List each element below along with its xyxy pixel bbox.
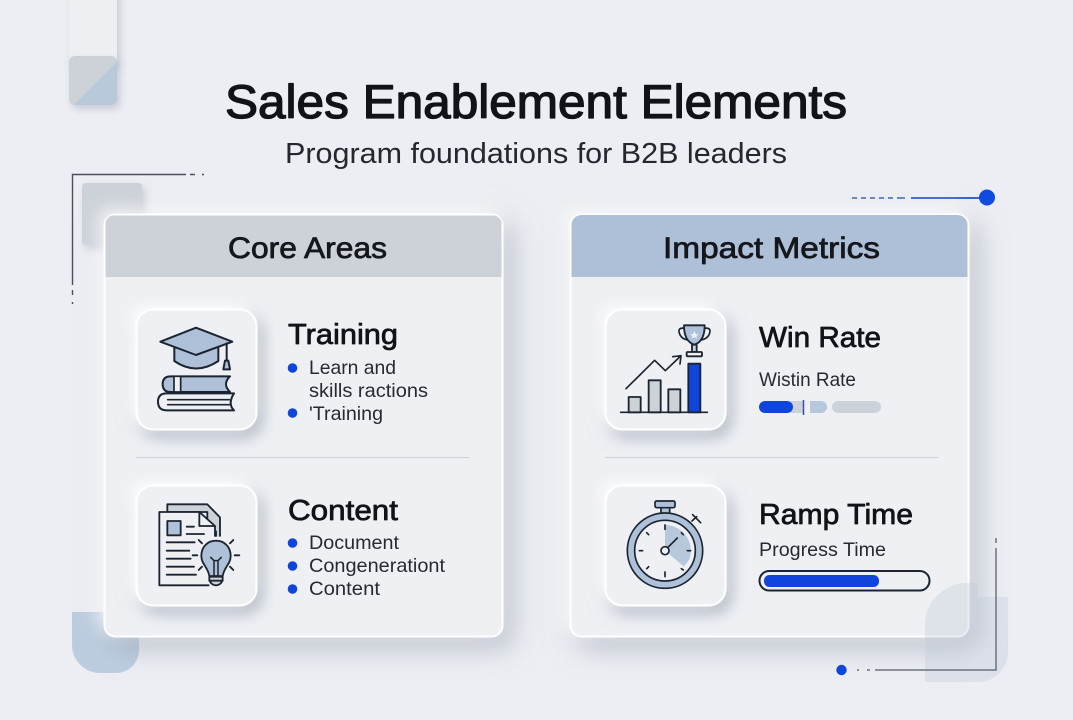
bullet list: training: 'Training — [309, 403, 383, 425]
bullet list: training: Learn and — [309, 357, 396, 379]
sublabel: progress time: Progress Time — [759, 539, 886, 561]
subtitle: Program foundations for B2B leaders — [285, 138, 787, 170]
icon: document and light bulb — [136, 486, 256, 606]
segmented progress bar — [759, 400, 881, 415]
icon: stopwatch — [606, 486, 726, 606]
row: win rate — [606, 310, 881, 430]
row: training — [136, 310, 428, 430]
sublabel: wistin rate: Wistin Rate — [759, 369, 856, 391]
bullet list: content: Congenerationt — [309, 555, 446, 577]
bullet list: training — [288, 357, 428, 425]
panel header — [572, 215, 968, 277]
decoration: bottom-right translucent shape — [925, 583, 1008, 682]
panel: impact metrics — [570, 214, 968, 636]
label: win rate: Win Rate — [759, 322, 881, 354]
label: ramp time: Ramp Time — [759, 499, 913, 531]
bullet list: content — [288, 532, 446, 600]
bullet list: training: skills ractions — [309, 380, 428, 402]
title: Sales Enablement Elements — [225, 75, 847, 128]
label: content: Content — [288, 495, 398, 527]
panel card — [570, 214, 968, 636]
bullet list: content: Content — [309, 578, 381, 600]
decoration: bottom-left shape — [72, 612, 139, 673]
progress bar — [760, 571, 930, 590]
decoration: top-right connector — [852, 190, 995, 206]
heading: impact metrics: Impact Metrics — [663, 232, 880, 265]
row: content — [136, 486, 446, 606]
decoration: top-left folded tab — [69, 0, 117, 105]
label: training: Training — [288, 319, 398, 351]
icon: bar chart with trophy — [606, 310, 726, 430]
panel card — [104, 214, 502, 636]
icon: graduation cap and books — [136, 310, 256, 430]
panel: core areas — [104, 214, 502, 636]
panel header — [106, 216, 502, 277]
bullet list: content: Document — [309, 532, 400, 554]
heading: core areas: Core Areas — [228, 232, 387, 265]
row: ramp time — [606, 486, 930, 606]
decoration: top-left bracket — [72, 174, 204, 304]
decoration: bottom-right connector — [836, 538, 996, 675]
